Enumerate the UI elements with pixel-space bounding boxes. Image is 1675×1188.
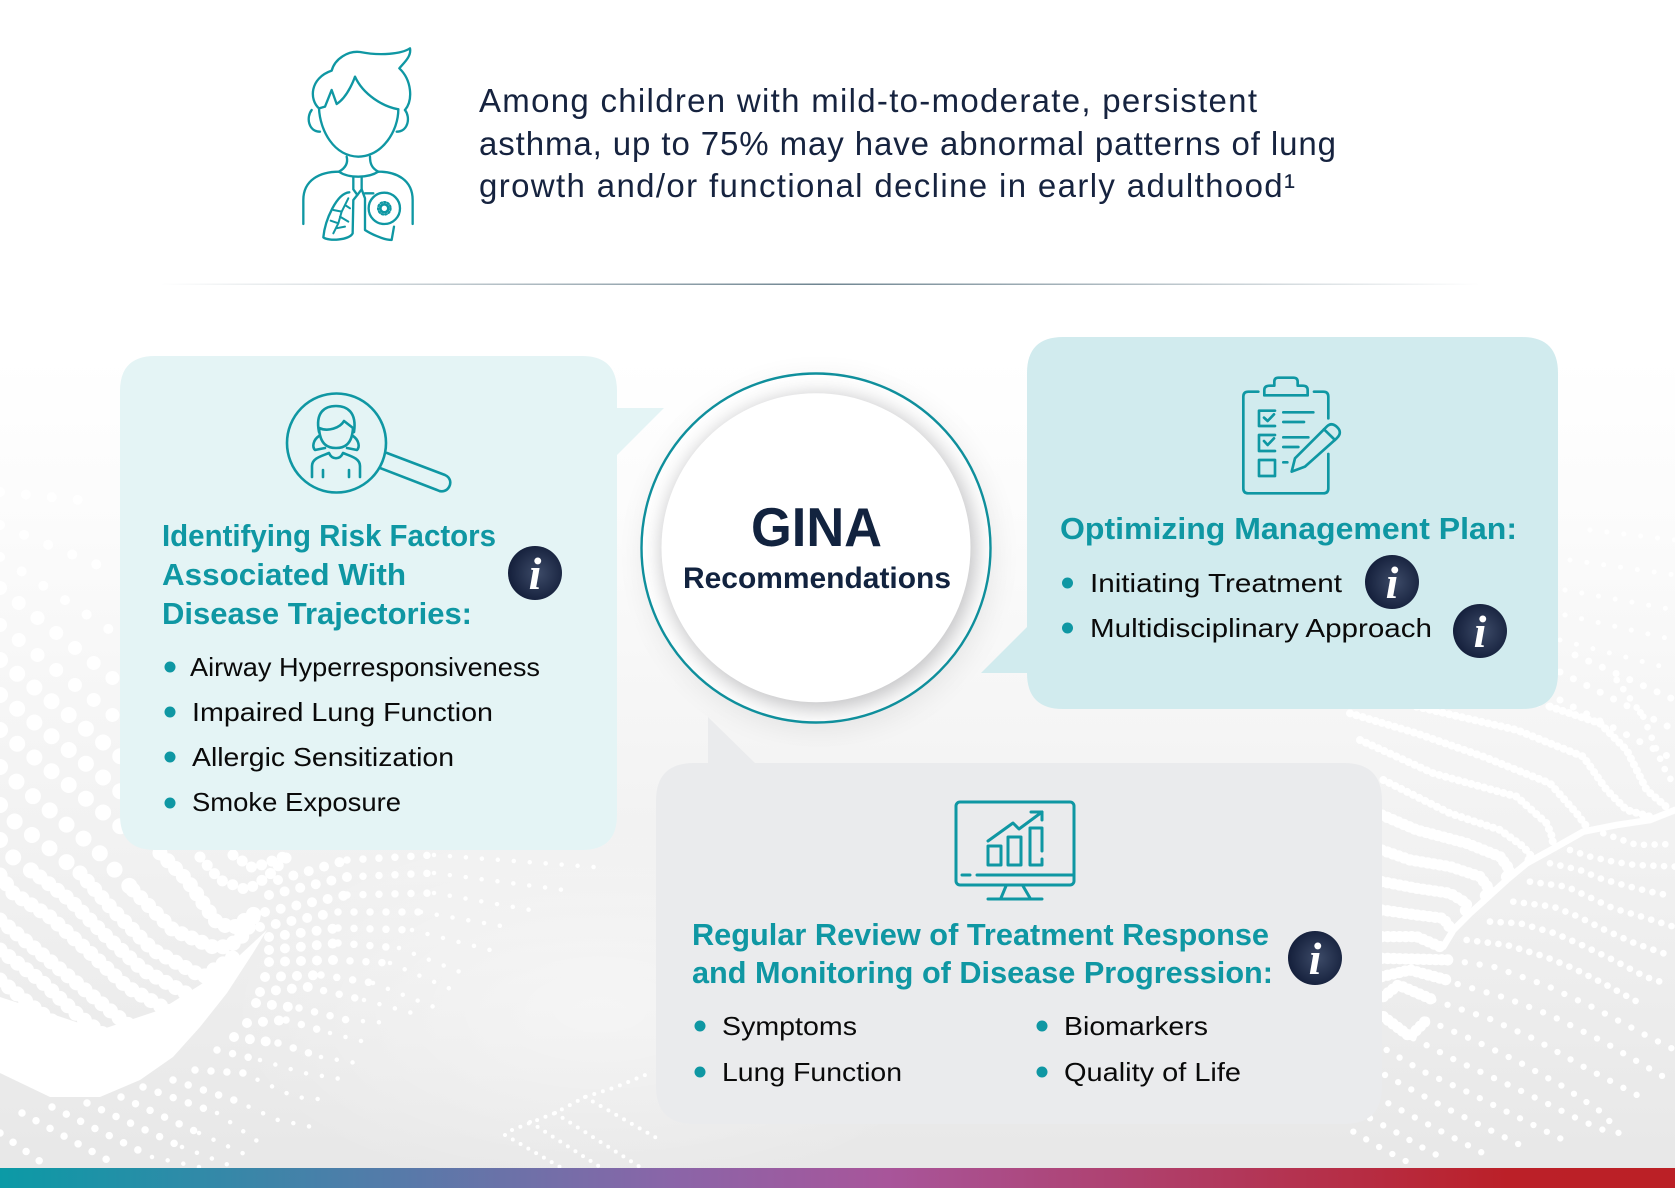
- icon: magnifier over child: [287, 394, 450, 492]
- header statement: Among children with mild-to-moderate, persistent: [479, 82, 1257, 119]
- list: review items: Symptoms: [722, 1011, 857, 1041]
- list: review items: [694, 1011, 1241, 1087]
- footer gradient bar: [0, 1168, 1675, 1188]
- panel: identifying risk factors: [120, 356, 664, 850]
- header statement: growth and/or functional decline in early adulthood¹: [479, 167, 1295, 204]
- central circle: GINA recommendations: [642, 374, 995, 730]
- panel: optimizing management plan: [981, 337, 1558, 709]
- icon: monitor with chart: [956, 802, 1074, 899]
- heading: risk factors: Disease Trajectories:: [162, 596, 472, 631]
- list: management plan: Initiating Treatment: [1090, 568, 1343, 598]
- list: risk factors: Impaired Lung Function: [192, 697, 493, 727]
- info icon: [1365, 555, 1419, 609]
- heading: regular review: [692, 917, 1273, 990]
- info icon: [508, 546, 562, 600]
- info icon: i: [1386, 557, 1399, 608]
- info icon: [1288, 931, 1342, 985]
- header icon: child with lungs: [303, 48, 413, 240]
- heading: regular review: and Monitoring of Disease Progression:: [692, 955, 1273, 990]
- heading: risk factors: Associated With: [162, 557, 406, 592]
- list: management plan: [1062, 568, 1432, 643]
- list: risk factors: Airway Hyperresponsiveness: [190, 652, 540, 682]
- list: risk factors: Allergic Sensitization: [192, 742, 454, 772]
- list: management plan: Multidisciplinary Approach: [1090, 613, 1432, 643]
- header statement: asthma, up to 75% may have abnormal patterns of lung: [479, 125, 1336, 162]
- title: GINA: [751, 496, 882, 558]
- panel: regular review: [656, 717, 1382, 1124]
- info icon: i: [529, 548, 542, 599]
- info icon: i: [1309, 933, 1322, 984]
- header statement: [479, 82, 1336, 204]
- subtitle: Recommendations: [683, 562, 951, 595]
- list: review items: Biomarkers: [1064, 1011, 1208, 1041]
- heading: management plan: Optimizing Management Plan:: [1060, 511, 1517, 546]
- info icon: [1453, 604, 1507, 658]
- list: review items: Lung Function: [722, 1057, 902, 1087]
- list: risk factors: Smoke Exposure: [192, 787, 401, 817]
- list: review items: Quality of Life: [1064, 1057, 1241, 1087]
- info icon: i: [1474, 606, 1487, 657]
- heading: risk factors: Identifying Risk Factors: [162, 518, 496, 553]
- background with dotted waves: [0, 667, 1675, 1168]
- heading: risk factors: [162, 518, 496, 631]
- list: risk factors: [164, 652, 540, 817]
- icon: clipboard checklist: [1243, 378, 1340, 493]
- heading: regular review: Regular Review of Treatment Response: [692, 917, 1269, 952]
